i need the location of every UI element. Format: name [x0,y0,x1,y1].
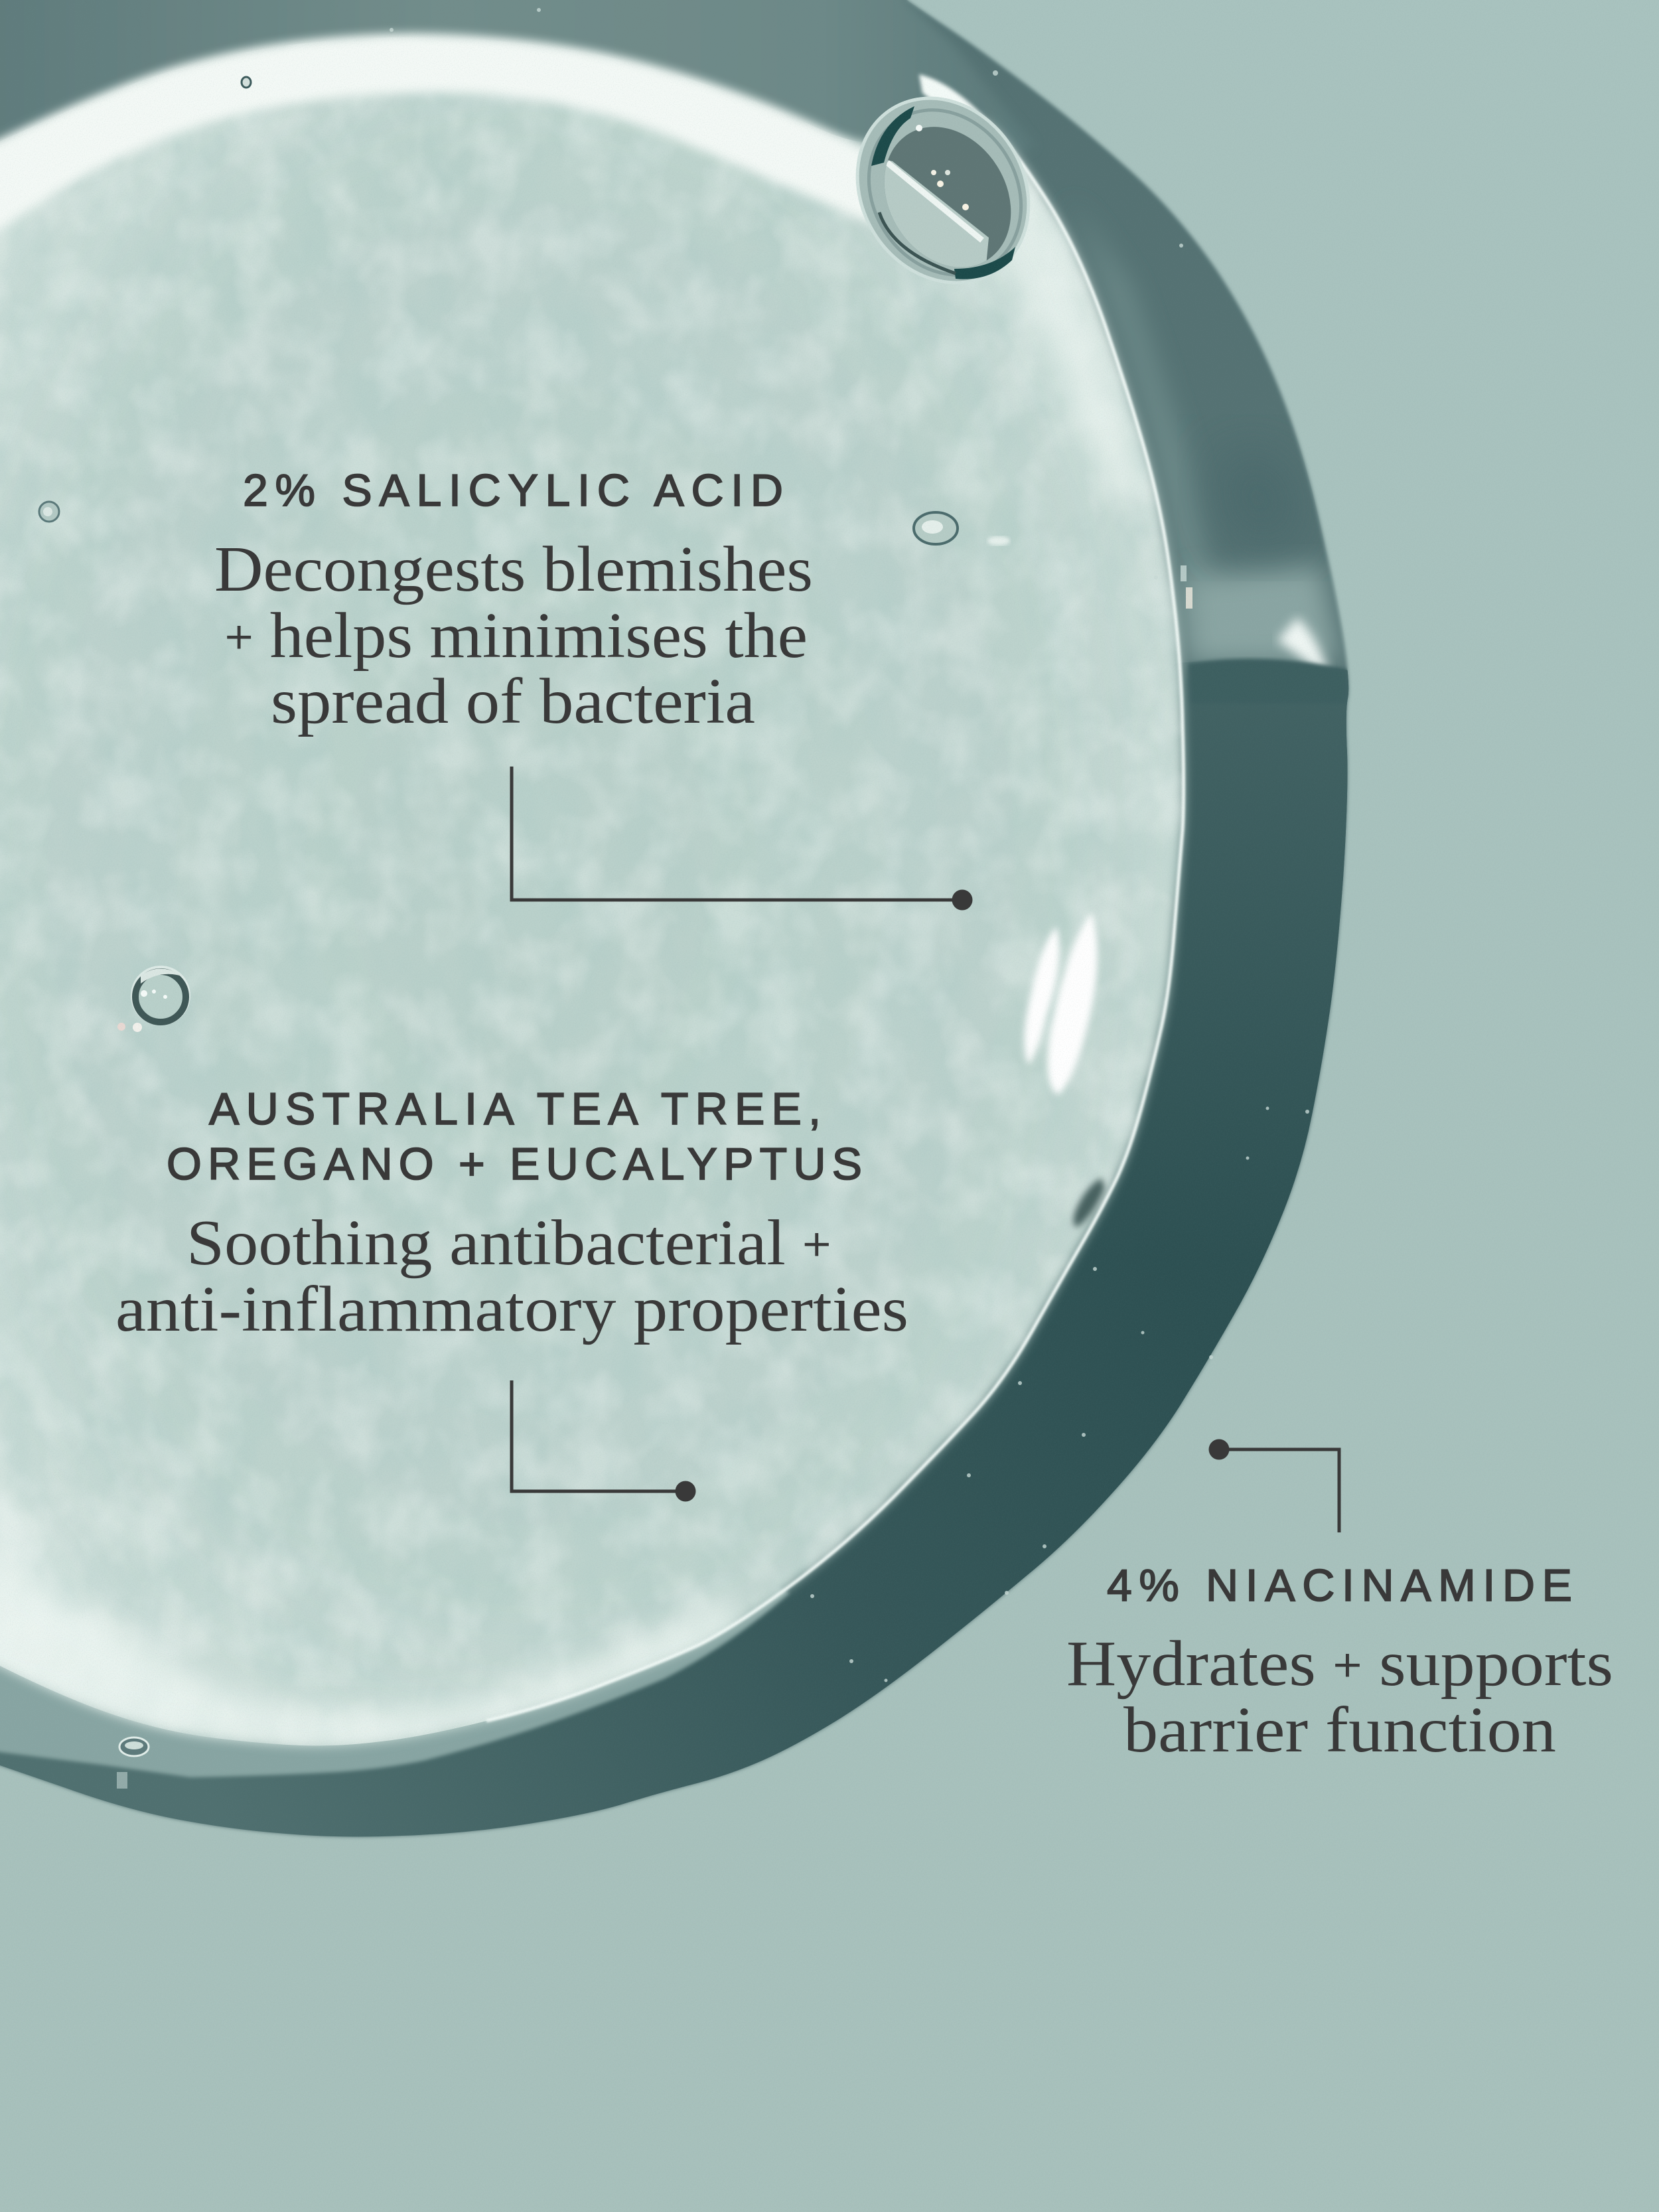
bright glow bottom left [0,1526,743,1752]
lens body [0,37,1184,1745]
bubble: large [824,66,1062,315]
highlight above bubble [919,74,1025,199]
specks on shadow [117,8,1309,1789]
text: salicylic acid benefits: spread of bacteria [271,666,755,737]
text: niacinamide benefits [1066,1628,1613,1766]
glare spot [987,536,1010,546]
bubble: medium right [914,512,958,544]
lower rim tone [0,1526,790,1777]
connector line: tea tree blend [512,1380,695,1501]
text: niacinamide benefits: Hydrates + supports [1066,1628,1613,1700]
heading: tea tree blend: AUSTRALIA TEA TREE, [209,1084,821,1134]
text: salicylic acid benefits: + helps minimises the [225,600,808,672]
drop shadow band [0,0,1348,1836]
bright top band [0,35,876,259]
bubble: medium left [117,966,190,1032]
text: tea tree blend benefits: Soothing antibacterial + [186,1207,831,1279]
heading: tea tree blend [167,1084,862,1189]
dark smudge [1074,1178,1105,1228]
heading: tea tree blend: OREGANO + EUCALYPTUS [167,1139,862,1189]
upper rim tone [0,0,1015,142]
bubble dark arcs [871,106,914,166]
callout: niacinamide [1066,1439,1613,1766]
heading: niacinamide: 4% NIACINAMIDE [1107,1560,1572,1611]
text: tea tree blend benefits [115,1207,908,1345]
bubble: small left [39,502,59,522]
shadow tones [0,199,1367,1858]
callout: salicylic acid [214,465,973,911]
refraction glints [1025,926,1060,1065]
lens bright rim [486,127,1184,1721]
text: salicylic acid benefits: Decongests blemishes [214,534,813,605]
text: salicylic acid benefits [214,534,813,737]
bubble: bottom [119,1737,149,1756]
gel drop [0,0,1351,1840]
callout: tea tree, oregano, eucalyptus [115,1084,908,1501]
bright glow right [956,126,1155,518]
lens texture [0,0,1194,1759]
bubble inner [859,103,1037,291]
heading: salicylic acid: 2% SALICYLIC ACID [243,465,783,516]
connector line: salicylic acid [512,767,973,911]
text: tea tree blend benefits: anti-inflammatory properties [115,1274,908,1345]
connector line: niacinamide [1209,1439,1339,1532]
text: niacinamide benefits: barrier function [1123,1694,1556,1766]
bubble: tiny top [242,77,251,88]
